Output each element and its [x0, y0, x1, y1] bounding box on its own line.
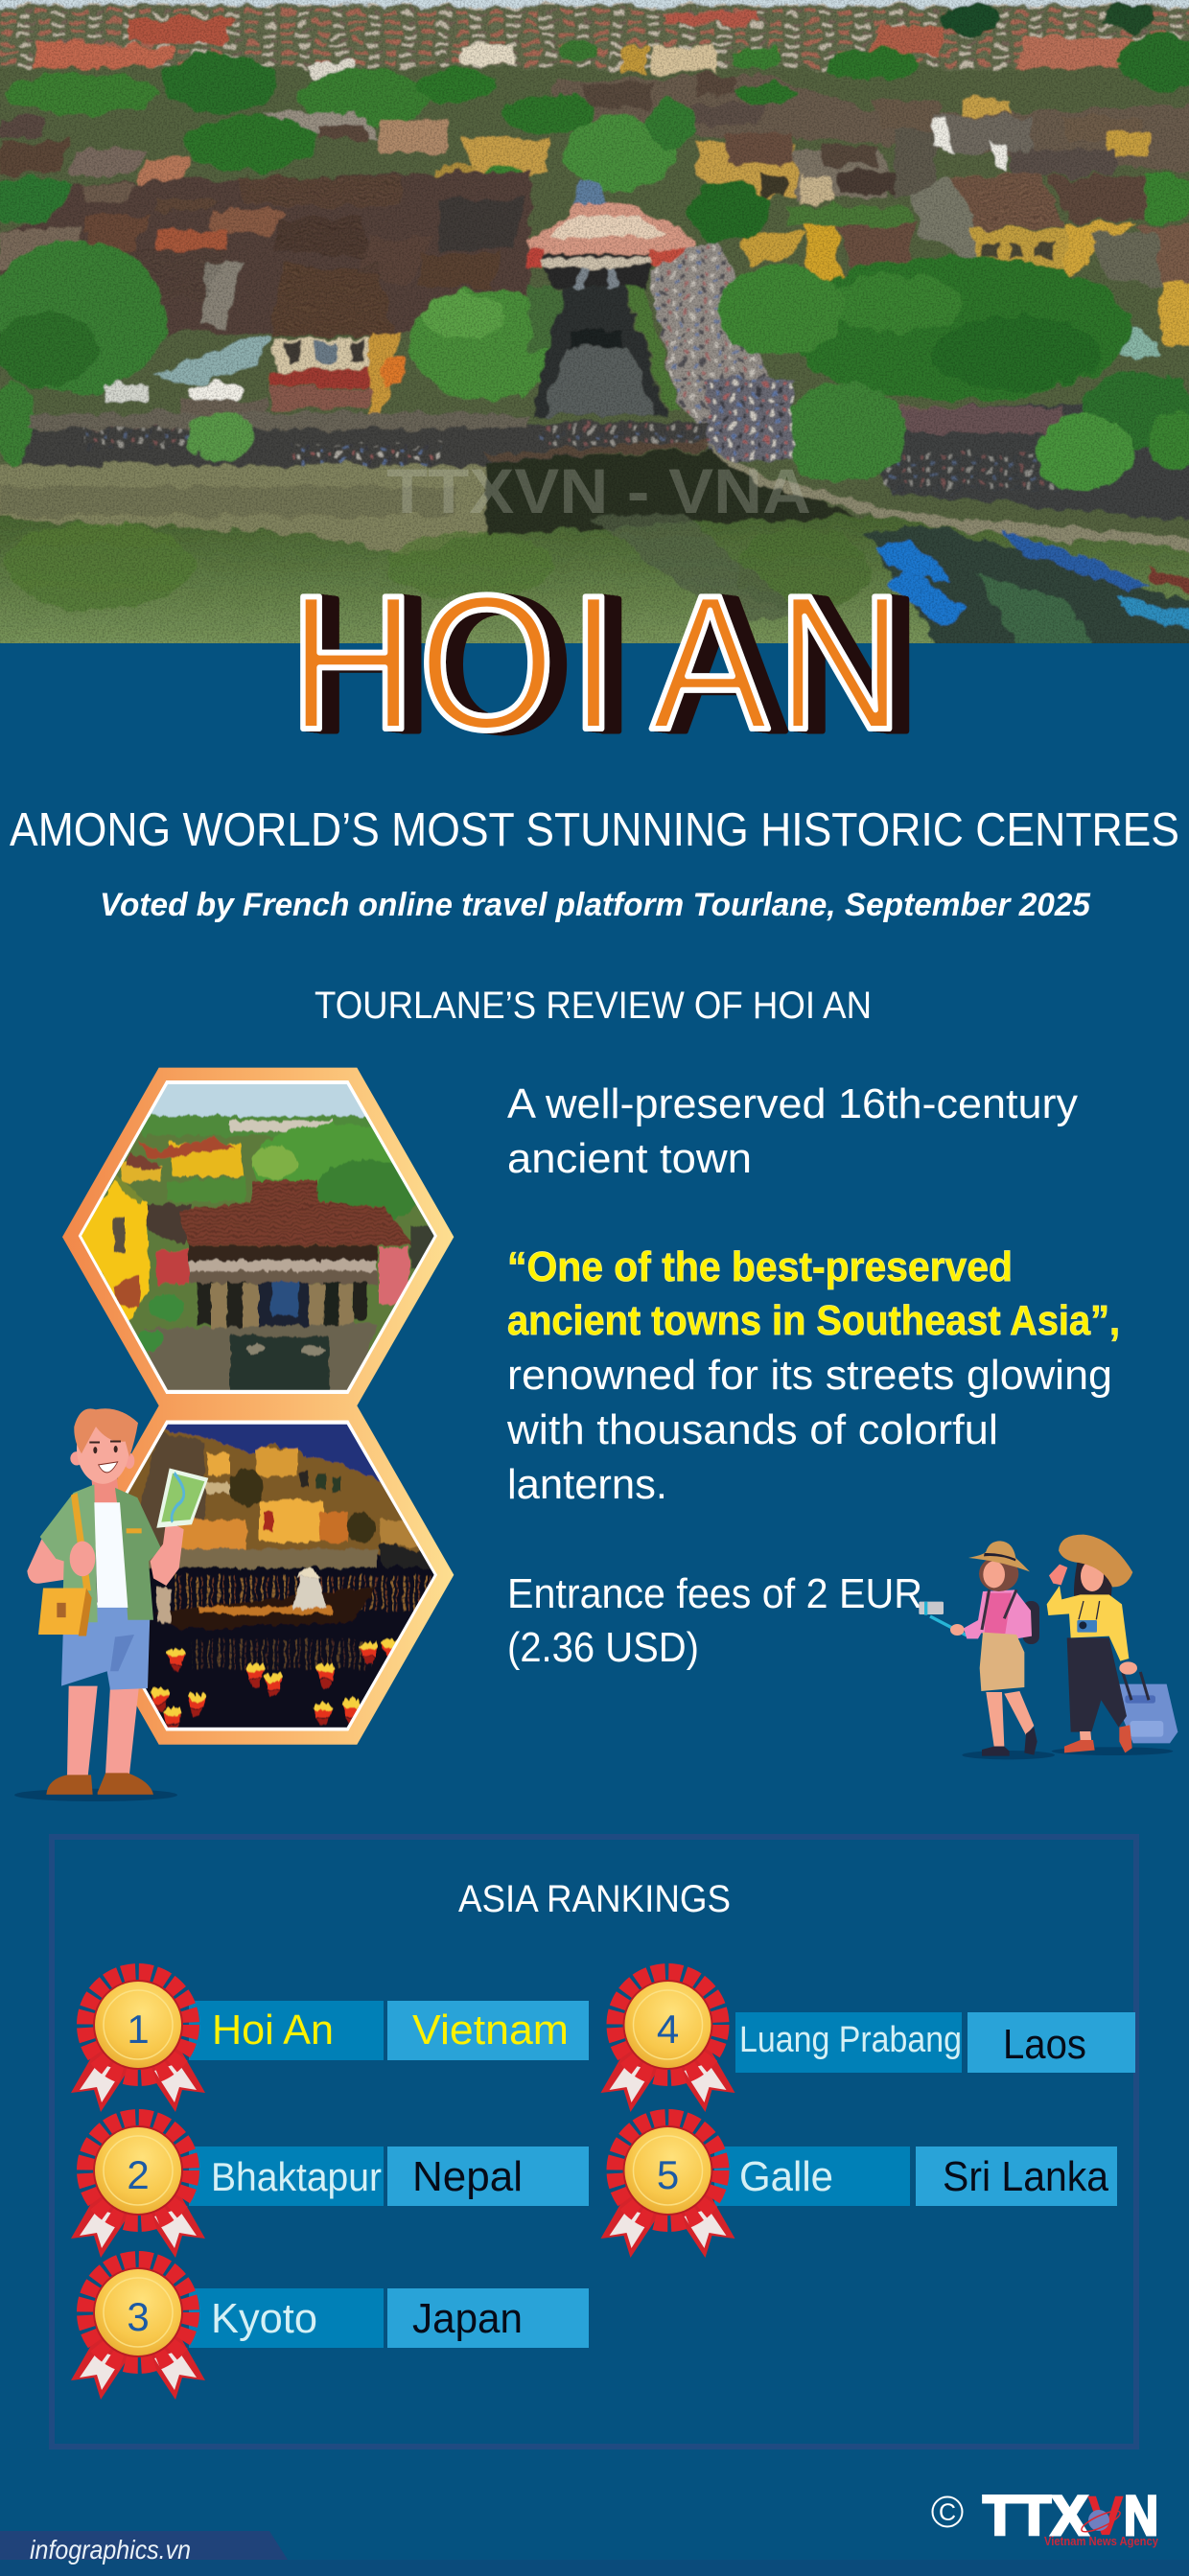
rank 4: Luang Prabang, Laos: Laos	[1003, 2021, 1086, 2068]
rank 1: Hoi An, Vietnam: Hoi An	[212, 2007, 334, 2054]
highlighted quote: “One of the best-preserved	[507, 1243, 1013, 1290]
rank 2: Bhaktapur, Nepal: 2	[127, 2152, 150, 2197]
rank 4: Luang Prabang, Laos: 4	[657, 2007, 679, 2052]
rank 3: Kyoto, Japan: 3	[127, 2294, 150, 2339]
panel: Asia rankings	[52, 1837, 1136, 2447]
rank 2: Bhaktapur, Nepal: Bhaktapur	[211, 2154, 382, 2199]
rank 3: Kyoto, Japan: Japan	[412, 2295, 523, 2342]
rank 2: Bhaktapur, Nepal	[71, 2119, 589, 2258]
rank 4: Luang Prabang, Laos: Luang Prabang	[739, 2020, 962, 2060]
logo: copyright TTXVN: C	[939, 2499, 956, 2526]
text block: review details	[506, 1080, 1120, 1671]
footer strip	[0, 2560, 1189, 2576]
text block: review details: (2.36 USD)	[507, 1624, 699, 1671]
illustration: two female tourists	[919, 1535, 1177, 1759]
rank 1: Hoi An, Vietnam	[71, 1973, 589, 2112]
rank 5: Galle, Sri Lanka: Sri Lanka	[943, 2153, 1108, 2200]
panel: hexagon photos	[62, 1068, 454, 1745]
section heading: review: TOURLANE’S REVIEW OF HOI AN	[315, 985, 872, 1027]
text block: review details: with thousands of colorful	[506, 1406, 998, 1453]
text block: review details: lanterns.	[507, 1461, 667, 1508]
illustration: male tourist with map	[14, 1408, 208, 1801]
rank 4: Luang Prabang, Laos	[600, 1973, 1135, 2112]
logo: copyright TTXVN: N	[1124, 2485, 1158, 2547]
woman with pink top	[950, 1541, 1039, 1756]
rank 5: Galle, Sri Lanka: Galle	[739, 2153, 833, 2200]
text block: review details: Entrance fees of 2 EUR	[507, 1570, 922, 1617]
footer tab: infographics.vn: infographics.vn	[30, 2535, 191, 2564]
rank 1: Hoi An, Vietnam: 1	[127, 2007, 150, 2052]
text block: review details: ancient town	[507, 1135, 752, 1182]
logo: copyright TTXVN: TTX	[983, 2485, 1088, 2547]
highlighted quote	[507, 1243, 1120, 1344]
highlighted quote: ancient towns in Southeast Asia”,	[507, 1297, 1120, 1344]
text block: review details: renowned for its streets glowing	[507, 1352, 1112, 1399]
selfie stick	[919, 1602, 967, 1636]
rank 5: Galle, Sri Lanka	[600, 2119, 1117, 2258]
rankings heading: ASIA RANKINGS	[458, 1878, 731, 1920]
subheading: voted by Tourlane: Voted by French online travel platform Tourlane, September 2025	[100, 887, 1091, 923]
text block: review details: A well-preserved 16th-century	[507, 1080, 1078, 1127]
footer tab: infographics.vn	[0, 2531, 288, 2564]
rank 3: Kyoto, Japan: Kyoto	[211, 2295, 317, 2342]
photo: Japanese covered bridge	[79, 1080, 437, 1394]
hero photo: aerial view of Hoi An	[0, 0, 1189, 674]
rank 2: Bhaktapur, Nepal: Nepal	[412, 2153, 523, 2200]
logo: copyright TTXVN: V	[1087, 2485, 1124, 2547]
rank 5: Galle, Sri Lanka: 5	[657, 2152, 679, 2197]
logo: copyright TTXVN	[932, 2485, 1159, 2548]
photo: lantern night on river	[96, 1421, 437, 1731]
photo watermark: TTXVN - VNA	[386, 455, 811, 526]
hexagon frames	[62, 1068, 454, 1745]
rank 3: Kyoto, Japan	[71, 2261, 589, 2400]
logo: copyright TTXVN: Vietnam News Agency	[1044, 2534, 1159, 2548]
woman with yellow top and suitcase	[1047, 1535, 1177, 1752]
title: HOI AN: HOIAN	[289, 555, 903, 770]
rank 1: Hoi An, Vietnam: Vietnam	[412, 2007, 569, 2054]
